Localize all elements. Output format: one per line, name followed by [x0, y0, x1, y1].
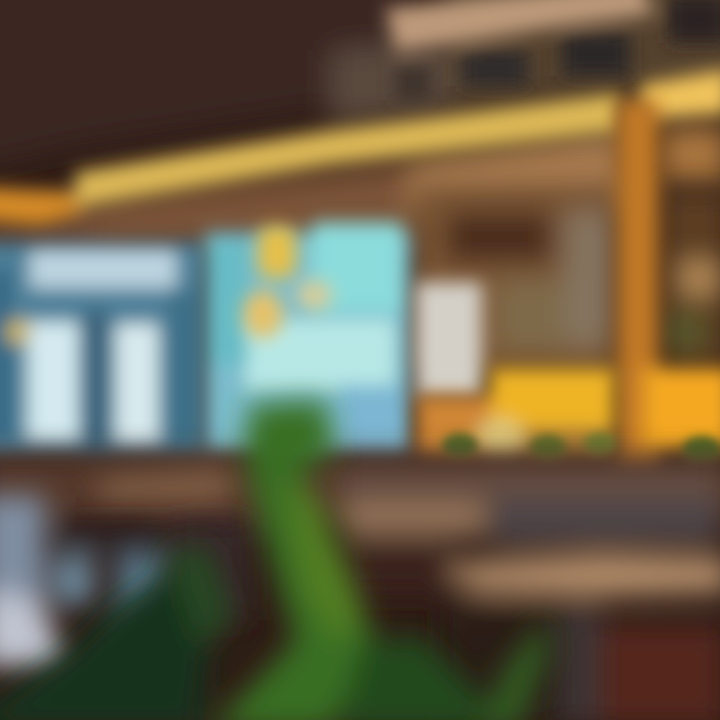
white panel [416, 282, 482, 398]
lower left furniture [0, 495, 250, 670]
upper right beam and dark windows [385, 0, 720, 100]
wall below the beam [0, 125, 720, 250]
panel: shelves [412, 185, 720, 375]
panel: blue windows [0, 242, 204, 460]
vertical orange post [617, 100, 659, 470]
yellow light beam [0, 68, 720, 226]
ceiling: dark wood [0, 0, 720, 170]
counter and bar [0, 455, 720, 720]
icon: hanging lamps [243, 226, 332, 338]
yellow lit shelves [416, 368, 720, 458]
plant foreground [0, 400, 550, 720]
panel: teal wall [205, 222, 410, 454]
small plants on shelf [442, 433, 720, 464]
